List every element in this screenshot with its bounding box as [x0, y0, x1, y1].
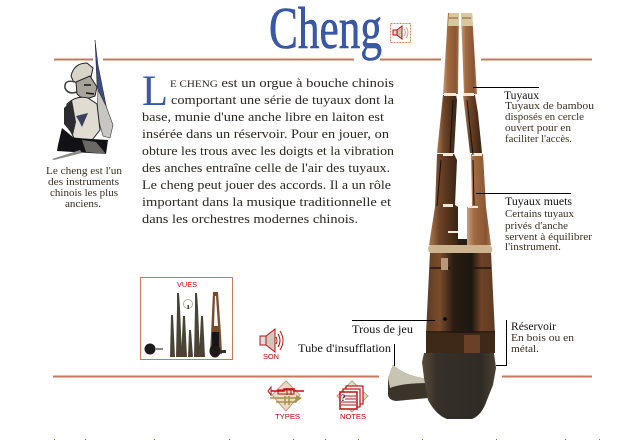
callout: tuyaux: ouvert pour en — [505, 123, 571, 134]
thumbnails: cheng views — [144, 292, 226, 358]
callout: réservoir: métal. — [511, 344, 539, 355]
caption: figure — [46, 166, 122, 210]
callout: tuyaux muets: privés d'anche — [505, 221, 569, 232]
body text: important dans la musique traditionnelle et — [142, 195, 392, 209]
icon: notes — [337, 381, 368, 421]
collar — [428, 245, 492, 253]
icon: notes: ? — [341, 393, 346, 403]
callout: trous de jeu: Trous de jeu — [352, 324, 413, 336]
caption: figure: anciens. — [65, 199, 101, 210]
callout: réservoir: Réservoir — [511, 321, 556, 333]
label: son: SON — [263, 354, 279, 361]
illustration: figure with cheng — [52, 40, 113, 160]
panel: vues — [140, 278, 232, 360]
callout: tuyaux: faciliter l'accès. — [505, 134, 572, 145]
label: vues: VUES — [177, 282, 197, 289]
body text: des anches entraîne celle de l'air des tuyaux. — [142, 161, 390, 175]
callout: tuyaux: Tuyaux de bambou — [505, 101, 594, 112]
icon: son — [260, 329, 283, 361]
callout: tube d'insufflation — [298, 343, 394, 366]
illustration: cheng instrument — [388, 13, 496, 419]
caption: figure: des instruments — [48, 177, 119, 188]
callout: tube d'insufflation: Tube d'insufflation — [298, 343, 391, 355]
callout: tuyaux: Tuyaux — [504, 90, 539, 102]
body text: E CHENG est un orgue à bouche chinois — [170, 76, 394, 90]
caption: figure: Le cheng est l'un — [46, 166, 122, 177]
right pipe sections — [461, 13, 477, 94]
callout: tuyaux muets: l'instrument. — [505, 242, 561, 253]
callout: tuyaux — [473, 88, 594, 145]
pipe bands — [448, 13, 473, 26]
callout: tuyaux muets: servent à équilibrer — [505, 232, 593, 243]
body text: obture les trous avec les doigts et la vibration — [142, 144, 395, 158]
top divider — [54, 58, 592, 60]
body text: comportant une série de tuyaux dont la — [171, 93, 395, 107]
body text: dans les orchestres modernes chinois. — [142, 212, 358, 226]
label: types: TYPES — [275, 414, 300, 421]
caption: figure: chinois les plus — [50, 188, 118, 199]
label: notes: NOTES — [340, 414, 366, 421]
callout: trous de jeu — [352, 320, 435, 336]
bottom divider — [53, 376, 592, 378]
body text: insérée dans un réservoir. Pour en jouer, on — [142, 127, 390, 141]
callout: tuyaux muets — [476, 194, 593, 253]
body text — [142, 76, 395, 226]
callout: tuyaux muets: Certains tuyaux — [505, 209, 574, 220]
callout: réservoir: En bois ou en — [511, 333, 574, 344]
callout: tuyaux: disposés en cercle — [505, 112, 585, 123]
mouthpiece — [388, 365, 428, 401]
icon: types — [268, 381, 304, 421]
drop cap: L — [142, 68, 168, 115]
body text: Le cheng peut jouer des accords. Il a un rôle — [142, 178, 392, 192]
callout: réservoir — [496, 320, 574, 366]
main pipe body — [426, 252, 495, 353]
bowl — [422, 353, 496, 419]
body text: base, munie d'une anche libre en laiton est — [142, 110, 385, 124]
icon: title sound button — [390, 24, 410, 42]
left pipe sections — [443, 13, 459, 94]
callout: tuyaux muets: Tuyaux muets — [505, 196, 573, 208]
